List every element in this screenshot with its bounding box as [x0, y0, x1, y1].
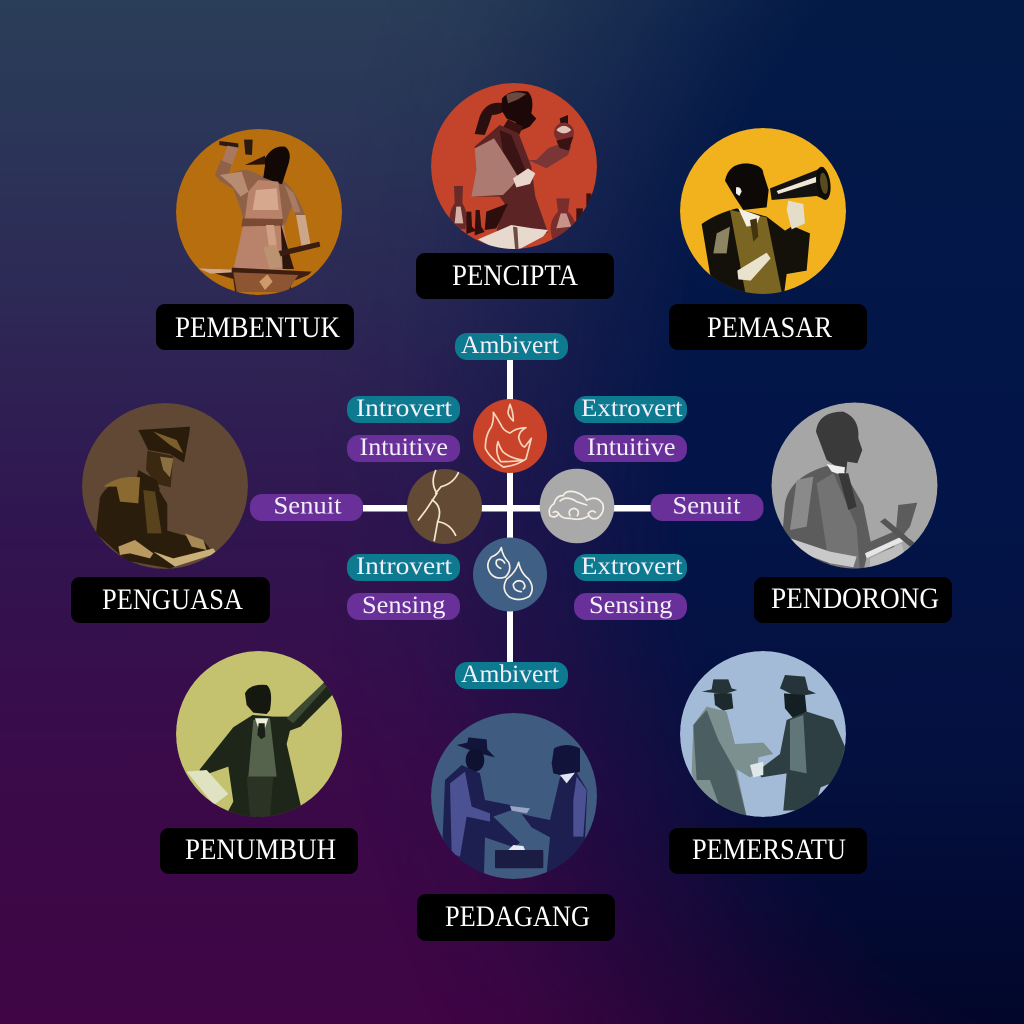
portrait: man at podium — [772, 402, 938, 572]
pill: Extrovert upper right: Extrovert — [581, 395, 683, 422]
label: PENGUASA: PENGUASA — [102, 583, 243, 616]
portrait: man with outstretched arm — [176, 651, 342, 820]
label: PENDORONG — [754, 577, 952, 623]
portrait: alchemist — [431, 83, 597, 252]
label: PENDORONG: PENDORONG — [771, 582, 939, 615]
icon: fire — [473, 399, 547, 473]
axis cross lines — [363, 360, 651, 662]
label: PENCIPTA — [416, 253, 614, 299]
pill: Extrovert lower right: Extrovert — [581, 553, 683, 580]
pill: Intuitive upper left: Intuitive — [360, 434, 448, 461]
label: PEMASAR — [669, 304, 867, 350]
panel: PEMERSATU — [669, 651, 867, 874]
label: PEMBENTUK: PEMBENTUK — [175, 311, 340, 344]
pill: Senuit right: Senuit — [672, 492, 741, 520]
icon: air cloud — [540, 469, 614, 543]
label: PEMERSATU: PEMERSATU — [692, 833, 846, 866]
panel: PENGUASA — [71, 403, 270, 623]
panel: PENDORONG — [754, 402, 952, 623]
panel: PEMASAR — [669, 128, 867, 350]
panel: PENCIPTA — [416, 83, 614, 299]
pill: Introvert lower left: Introvert — [356, 553, 452, 580]
pill: Sensing lower right: Sensing — [589, 592, 673, 619]
label: PENUMBUH — [160, 828, 358, 874]
pill: Intuitive upper right: Intuitive — [587, 434, 676, 461]
portrait: man with megaphone — [680, 128, 846, 300]
label: PEMASAR: PEMASAR — [707, 311, 832, 344]
label: PEDAGANG — [417, 894, 615, 941]
pill: Sensing lower left — [347, 592, 460, 620]
label: PEMBENTUK — [156, 304, 354, 350]
panel: PENUMBUH — [160, 651, 358, 874]
pill: Senuit left — [250, 492, 363, 521]
pill: Senuit right — [650, 492, 764, 521]
label: PENUMBUH: PENUMBUH — [185, 833, 336, 866]
pill: Ambivert top: Ambivert — [461, 332, 559, 359]
label: PENCIPTA: PENCIPTA — [452, 259, 578, 292]
panel: central axis diagram — [250, 332, 764, 689]
icon: water drops — [473, 538, 547, 612]
pill: Sensing lower right — [574, 592, 687, 620]
pill: Introvert upper left: Introvert — [356, 395, 452, 422]
label: PEMERSATU — [669, 828, 867, 874]
panel: PEMBENTUK — [156, 129, 354, 350]
portrait: handshake — [680, 651, 846, 817]
portrait: commander — [82, 403, 248, 569]
icon: earth crack — [407, 469, 482, 544]
pill: Sensing lower left: Sensing — [362, 592, 446, 619]
pill: Ambivert bottom: Ambivert — [461, 661, 559, 688]
portrait: blacksmith — [176, 129, 342, 295]
pill: Senuit left: Senuit — [274, 492, 342, 520]
panel: PEDAGANG — [417, 713, 615, 941]
label: PENGUASA — [71, 577, 270, 623]
label: PEDAGANG: PEDAGANG — [445, 900, 590, 933]
portrait: two traders — [431, 713, 597, 879]
